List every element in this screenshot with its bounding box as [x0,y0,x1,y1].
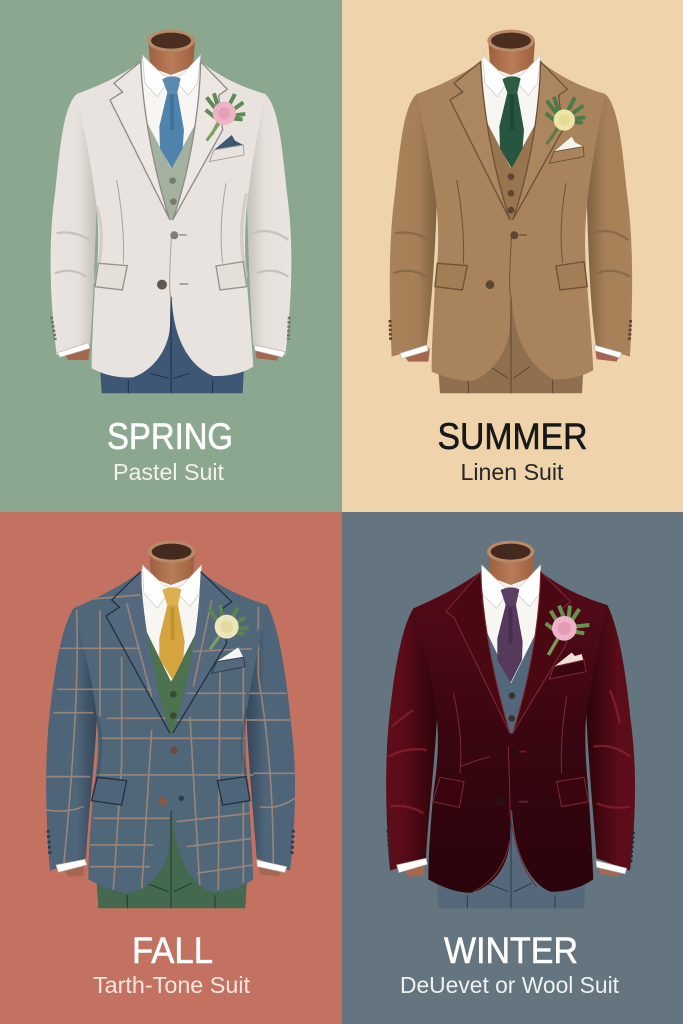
icon: boutonniere [209,605,249,649]
heading: spring: SPRING [107,416,233,457]
heading: summer: SUMMER [438,416,588,457]
panel: summer [342,0,683,512]
icon: boutonniere [206,93,245,141]
subheading: velvet or wool suit: DeUevet or Wool Suit [400,972,620,998]
heading: winter: WINTER [444,930,578,971]
illustration: summer linen suit [390,30,632,393]
plaid pattern [47,595,297,890]
panel: spring [0,0,342,512]
panel: winter [342,512,683,1024]
subheading: pastel suit: Pastel Suit [113,459,225,485]
icon: boutonniere [546,606,589,655]
illustration: fall earth-tone suit [46,541,297,908]
illustration: winter velvet suit [386,541,635,908]
illustration: spring pastel suit [51,30,291,393]
subheading: linen suit: Linen Suit [460,459,564,485]
icon: pocket square [209,135,244,162]
icon: boutonniere [546,97,585,144]
icon: pocket square [212,647,245,673]
icon: pocket square [549,137,584,163]
subheading: tarth-tone suit: Tarth-Tone Suit [93,972,251,998]
icon: pocket square [549,653,586,679]
panel: fall [0,512,342,1024]
heading: fall: FALL [132,930,213,971]
